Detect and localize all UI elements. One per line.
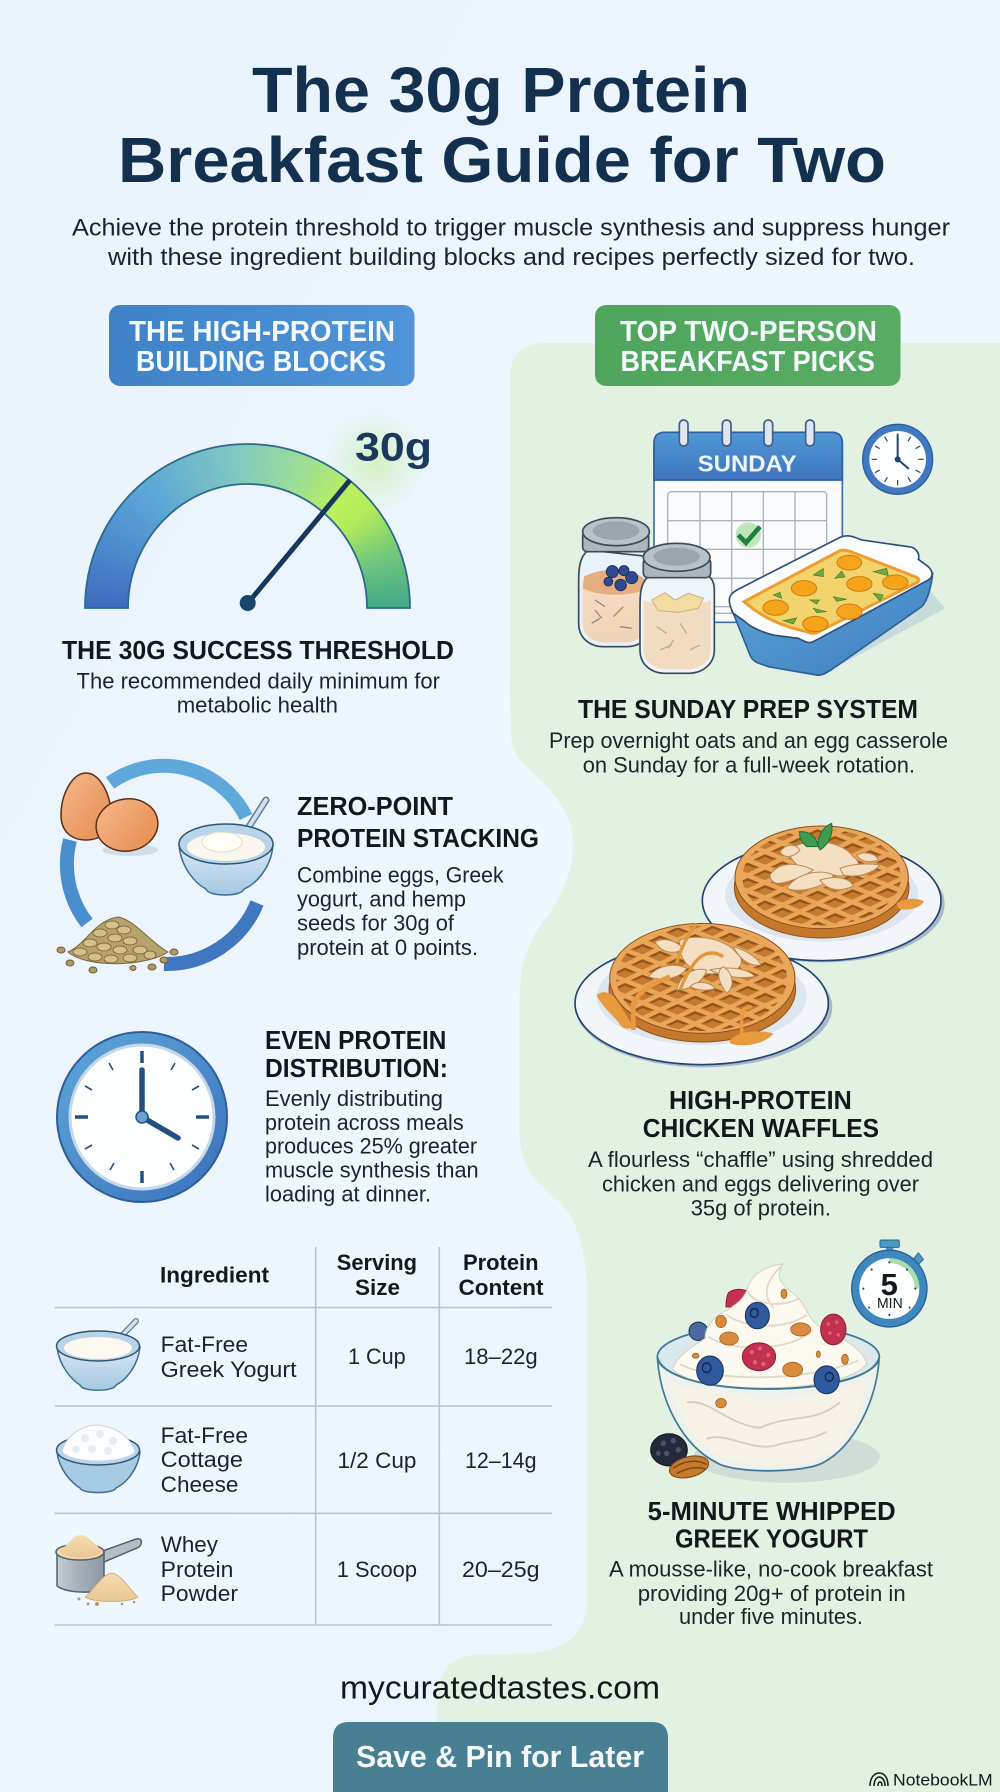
shredded chicken with sauce — [648, 937, 761, 993]
icon: clock — [57, 1032, 227, 1202]
text block: high-protein chicken waffles — [588, 1087, 933, 1221]
text block: even protein distribution: Evenly distributing — [265, 1086, 443, 1111]
row: whey protein powder: Whey — [161, 1532, 219, 1557]
text block: even protein distribution: EVEN PROTEIN — [265, 1027, 446, 1055]
icon: egg casserole dish — [729, 536, 945, 676]
gauge chart: 30g threshold — [85, 410, 432, 611]
text block: the sunday prep system: on Sunday for a full-week rotation. — [583, 753, 915, 778]
button: save and pin for later — [333, 1722, 668, 1792]
text block: even protein distribution: protein across meals — [265, 1110, 464, 1135]
text block: the sunday prep system — [549, 696, 948, 778]
row: cottage cheese: Fat-Free — [161, 1423, 248, 1448]
title — [118, 54, 886, 196]
text block: even protein distribution: muscle synthesis than — [265, 1158, 479, 1183]
title: The 30g Protein — [252, 54, 750, 126]
text block: high-protein chicken waffles: HIGH-PROTEIN — [669, 1087, 852, 1115]
row: cottage cheese: Cheese — [161, 1472, 238, 1497]
table header: Protein — [463, 1250, 538, 1275]
icon: 5 minute stopwatch — [852, 1240, 927, 1327]
subtitle — [72, 214, 950, 271]
text block: high-protein chicken waffles: CHICKEN WAFFLES — [643, 1115, 879, 1143]
panel: green picks background — [437, 343, 1000, 1792]
illustration: whipped greek yogurt bowl — [651, 1240, 927, 1483]
text block: zero-point protein stacking: protein at 0 points. — [297, 935, 478, 960]
text block: even protein distribution — [265, 1027, 479, 1207]
heading: the high-protein building blocks: BUILDING BLOCKS — [136, 346, 386, 378]
illustration: sunday prep calendar, jars and casserole — [579, 420, 945, 676]
text block: high-protein chicken waffles: chicken and eggs delivering over — [602, 1172, 919, 1197]
icon: back waffle plate — [702, 823, 945, 962]
text block: even protein distribution: produces 25% greater — [265, 1134, 477, 1158]
text block: 30g success threshold: THE 30G SUCCESS THRESHOLD — [62, 637, 454, 665]
subtitle: with these ingredient building blocks and recipes perfectly sized for two. — [107, 244, 915, 271]
icon: protein stacking ring with eggs, yogurt and seeds — [57, 766, 273, 973]
icon: calendar: SUNDAY — [698, 451, 797, 477]
text block: zero-point protein stacking: ZERO-POINT — [297, 793, 453, 821]
text block: 5-minute whipped greek yogurt: under five minutes. — [679, 1604, 863, 1629]
text block: the sunday prep system: Prep overnight oats and an egg casserole — [549, 728, 948, 753]
icon: yogurt bowl with berries — [657, 1264, 880, 1483]
icon: cottage cheese bowl — [56, 1425, 140, 1492]
stopwatch label: 5 — [881, 1267, 898, 1302]
text block: 30g success threshold: The recommended daily minimum for — [76, 669, 440, 694]
text block: 30g success threshold — [62, 637, 454, 718]
text block: zero-point protein stacking: Combine eggs, Greek — [297, 863, 504, 888]
icon: calendar — [654, 420, 842, 622]
table header: Ingredient — [160, 1263, 270, 1288]
table header: Content — [458, 1275, 544, 1300]
icon: small clock — [863, 424, 933, 494]
row: greek yogurt: 18–22g — [464, 1344, 538, 1369]
row: cottage cheese: 12–14g — [465, 1448, 536, 1473]
heading: the high-protein building blocks — [109, 305, 414, 386]
row: whey protein powder: 1 Scoop — [337, 1557, 417, 1582]
table header: Size — [355, 1275, 400, 1300]
text block: high-protein chicken waffles: A flourless “chaffle” using shredded — [588, 1147, 933, 1172]
text block: 5-minute whipped greek yogurt: 5-MINUTE WHIPPED — [648, 1498, 896, 1526]
table header — [160, 1250, 544, 1300]
text block: the sunday prep system: THE SUNDAY PREP SYSTEM — [578, 696, 918, 724]
row: greek yogurt: Greek Yogurt — [161, 1357, 297, 1382]
shredded chicken — [770, 842, 880, 890]
gauge value: 30g — [355, 426, 432, 470]
row: cottage cheese: 1/2 Cup — [338, 1448, 416, 1473]
icon: blackberry and pecan — [651, 1434, 711, 1482]
text block: even protein distribution: loading at dinner. — [265, 1182, 431, 1207]
row: whey protein powder: 20–25g — [462, 1557, 540, 1582]
icon: greek yogurt bowl — [56, 1321, 140, 1390]
row: whey protein powder — [161, 1532, 540, 1606]
heading: top two-person breakfast picks: TOP TWO-PERSON — [620, 316, 877, 348]
row: whey protein powder: Powder — [161, 1581, 239, 1606]
icon: jar of overnight oats — [640, 543, 714, 673]
text block: high-protein chicken waffles: 35g of protein. — [691, 1196, 831, 1221]
text block: 5-minute whipped greek yogurt: A mousse-like, no-cook breakfast — [609, 1556, 934, 1581]
row: greek yogurt — [161, 1332, 538, 1382]
row: greek yogurt: Fat-Free — [161, 1332, 248, 1357]
notebooklm watermark: NotebookLM — [893, 1770, 993, 1790]
text block: 5-minute whipped greek yogurt — [609, 1498, 934, 1629]
website url: mycuratedtastes.com — [340, 1670, 660, 1706]
icon: whey protein scoop — [56, 1535, 141, 1606]
subtitle: Achieve the protein threshold to trigger muscle synthesis and suppress hunger — [72, 214, 950, 242]
row: whey protein powder: Protein — [161, 1557, 233, 1582]
text block: 30g success threshold: metabolic health — [177, 692, 338, 718]
icon: front waffle plate — [575, 923, 832, 1067]
text block: zero-point protein stacking: yogurt, and hemp — [297, 887, 466, 912]
row: cottage cheese: Cottage — [161, 1447, 243, 1472]
button: save and pin for later: Save & Pin for Later — [356, 1739, 644, 1774]
illustration: chicken waffles on plates — [575, 823, 945, 1067]
row: cottage cheese — [161, 1423, 536, 1497]
icon: jar of overnight oats with blueberries — [579, 518, 650, 647]
stopwatch label — [877, 1267, 903, 1312]
text block: zero-point protein stacking — [297, 793, 539, 960]
text block: zero-point protein stacking: seeds for 30g of — [297, 911, 455, 936]
table header: Serving — [337, 1250, 417, 1275]
heading: top two-person breakfast picks — [595, 305, 900, 386]
row: greek yogurt: 1 Cup — [348, 1344, 406, 1369]
text block: 5-minute whipped greek yogurt: GREEK YOGURT — [675, 1526, 868, 1554]
text block: even protein distribution: DISTRIBUTION: — [265, 1055, 448, 1083]
title: Breakfast Guide for Two — [118, 124, 886, 196]
table: protein content by ingredient — [55, 1247, 552, 1625]
heading: the high-protein building blocks: THE HIGH-PROTEIN — [129, 316, 395, 348]
text block: 5-minute whipped greek yogurt: providing 20g+ of protein in — [638, 1581, 906, 1606]
text block: zero-point protein stacking: PROTEIN STACKING — [297, 825, 539, 853]
stopwatch label: MIN — [877, 1296, 903, 1312]
heading: top two-person breakfast picks: BREAKFAST PICKS — [620, 346, 875, 378]
